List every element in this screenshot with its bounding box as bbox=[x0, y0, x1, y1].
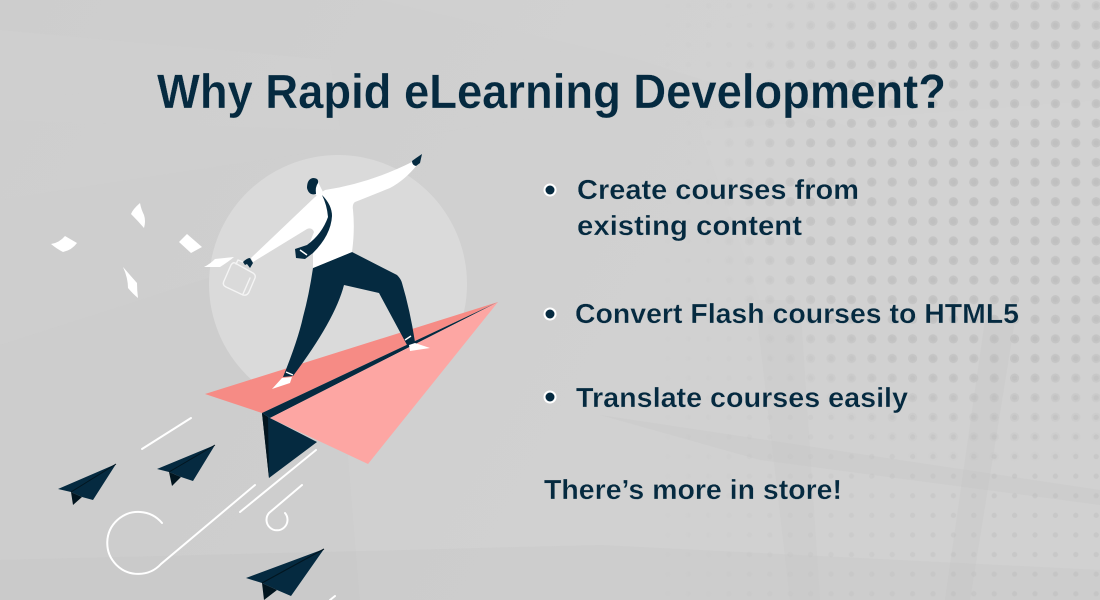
closing line: There’s more in store! bbox=[544, 474, 842, 505]
small paper plane left bbox=[58, 464, 116, 505]
bullet 1: Create courses from bbox=[577, 174, 859, 205]
large paper plane bbox=[205, 302, 498, 478]
illustration: man riding paper plane bbox=[51, 154, 498, 478]
tie stripe bbox=[300, 250, 307, 255]
backdrop circle bbox=[209, 155, 467, 413]
man bbox=[243, 154, 430, 389]
shirt and arms bbox=[251, 162, 417, 268]
hair bbox=[307, 178, 318, 194]
head bbox=[313, 178, 323, 196]
title: Why Rapid eLearning Development? bbox=[157, 66, 946, 119]
cuffs bbox=[286, 336, 411, 375]
bullet 2: Convert Flash courses to HTML5 bbox=[575, 298, 1019, 329]
background bbox=[788, 2, 1100, 596]
bullet 1 bbox=[544, 174, 859, 241]
tie bbox=[295, 195, 332, 259]
motion lines bbox=[107, 418, 335, 600]
trousers bbox=[283, 252, 415, 377]
bullet 3: Translate courses easily bbox=[576, 382, 908, 413]
flying papers bbox=[51, 203, 234, 298]
shoes bbox=[272, 343, 430, 389]
small paper plane middle bbox=[157, 445, 215, 486]
briefcase bbox=[223, 260, 255, 295]
bullet 1: existing content bbox=[577, 210, 802, 241]
small paper plane bottom bbox=[246, 549, 324, 600]
bullet list bbox=[544, 174, 1019, 413]
hands bbox=[243, 258, 253, 268]
